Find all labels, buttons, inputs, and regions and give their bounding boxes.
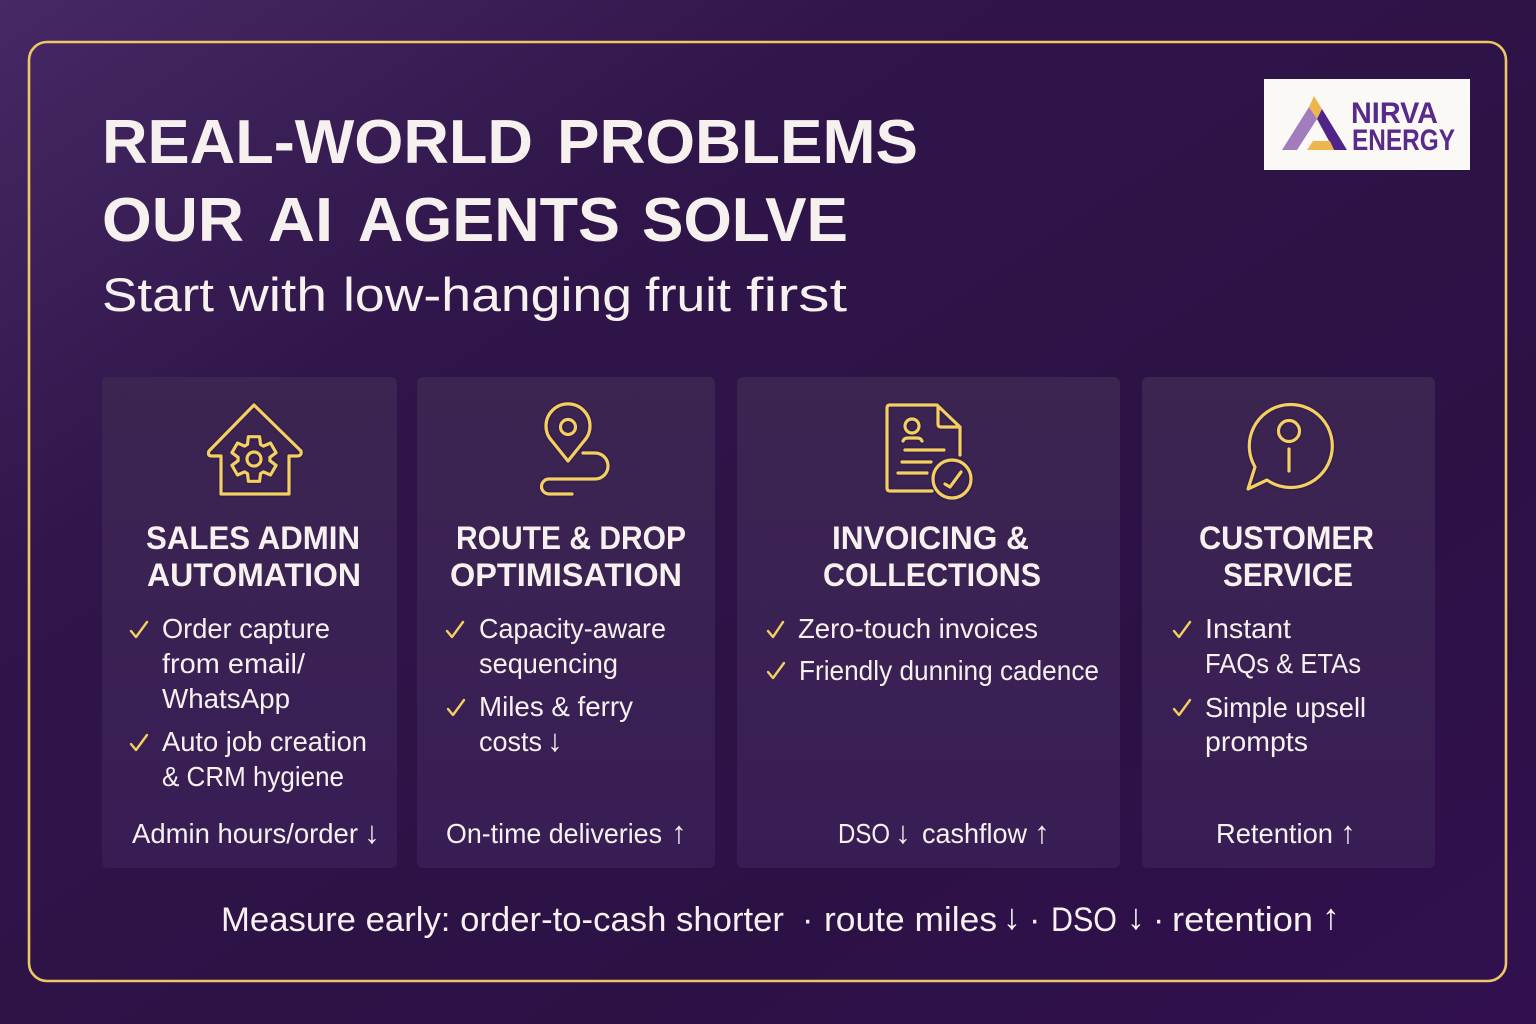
checklist: sales admin: & CRM hygiene bbox=[162, 761, 344, 792]
subtitle: first bbox=[746, 268, 847, 321]
checklist: route: Miles & ferry bbox=[479, 691, 633, 722]
metric: DSO and cashflow bbox=[838, 815, 1050, 850]
footer measures line: ↑ bbox=[1322, 896, 1340, 937]
heading: customer service bbox=[1199, 520, 1374, 593]
metric: retention: ↑ bbox=[1340, 815, 1356, 850]
footer measures line: retention bbox=[1172, 901, 1313, 939]
checklist: invoicing: Friendly dunning cadence bbox=[799, 655, 1099, 686]
icon: info speech bubble bbox=[1248, 404, 1332, 489]
metric: on-time deliveries: On-time deliveries bbox=[446, 818, 662, 849]
footer measures line: · bbox=[1153, 901, 1164, 939]
footer measures line: · bbox=[1029, 901, 1040, 939]
panel: route and drop optimisation bbox=[417, 377, 715, 868]
panel: invoicing and collections bbox=[737, 377, 1120, 868]
heading: invoicing and collections: COLLECTIONS bbox=[823, 557, 1041, 593]
subtitle: low-hanging bbox=[343, 268, 632, 321]
heading: invoicing and collections: INVOICING & bbox=[832, 520, 1029, 556]
heading: route and drop optimisation: OPTIMISATION bbox=[450, 557, 682, 593]
subtitle bbox=[102, 268, 847, 321]
panel: customer service bbox=[1142, 377, 1435, 868]
heading: route and drop optimisation: ROUTE & DROP bbox=[456, 520, 686, 556]
title: AGENTS bbox=[358, 186, 620, 255]
metric: DSO and cashflow: ↑ bbox=[1034, 815, 1050, 850]
checklist: customer service bbox=[1174, 613, 1366, 757]
checklist: invoicing bbox=[768, 613, 1099, 686]
footer measures line: DSO bbox=[1051, 901, 1117, 939]
checklist: customer service: prompts bbox=[1205, 726, 1308, 757]
heading: sales admin automation: SALES ADMIN bbox=[146, 520, 360, 556]
checklist: sales admin: Order capture bbox=[162, 613, 330, 644]
heading: sales admin automation: AUTOMATION bbox=[147, 557, 361, 593]
metric: admin hours: ↓ bbox=[364, 815, 380, 850]
subtitle: fruit bbox=[645, 268, 731, 321]
icon: document with check bbox=[887, 405, 971, 498]
checklist: sales admin: Auto job creation bbox=[162, 726, 367, 757]
icon: house with gear bbox=[208, 405, 301, 494]
checklist: route: ↓ bbox=[547, 723, 563, 758]
checklist: sales admin: from email/ bbox=[162, 648, 305, 679]
logo: Nirva Energy: NIRVA bbox=[1351, 97, 1438, 130]
logo: Nirva Energy: ENERGY bbox=[1352, 124, 1455, 157]
footer measures line: ↓ bbox=[1127, 896, 1145, 937]
checklist: route: sequencing bbox=[479, 648, 618, 679]
panel: sales admin automation bbox=[102, 377, 397, 868]
checklist: route bbox=[447, 613, 666, 758]
title: AI bbox=[268, 186, 333, 255]
checklist: route: costs bbox=[479, 726, 542, 757]
metric: DSO and cashflow: DSO bbox=[838, 818, 890, 849]
heading: invoicing and collections bbox=[823, 520, 1041, 593]
checklist: invoicing: Zero-touch invoices bbox=[798, 613, 1038, 644]
heading: route and drop optimisation bbox=[450, 520, 686, 593]
checklist: customer service: FAQs & ETAs bbox=[1205, 648, 1361, 679]
metric: on-time deliveries: ↑ bbox=[671, 815, 687, 850]
title: SOLVE bbox=[642, 186, 848, 255]
footer measures line bbox=[221, 896, 1340, 939]
footer measures line: route miles bbox=[824, 901, 997, 939]
checklist: sales admin bbox=[131, 613, 367, 792]
heading: customer service: CUSTOMER bbox=[1199, 520, 1374, 556]
title bbox=[102, 108, 918, 255]
title: REAL-WORLD bbox=[102, 108, 533, 177]
footer measures line: Measure early: order-to-cash shorter bbox=[221, 901, 784, 939]
metric: DSO and cashflow: cashflow bbox=[922, 818, 1028, 849]
heading: sales admin automation bbox=[146, 520, 361, 593]
subtitle: with bbox=[228, 268, 327, 321]
metric: DSO and cashflow: ↓ bbox=[895, 815, 911, 850]
subtitle: Start bbox=[102, 268, 214, 321]
footer measures line: · bbox=[802, 901, 813, 939]
title: OUR bbox=[102, 186, 244, 255]
heading: customer service: SERVICE bbox=[1223, 557, 1353, 593]
footer measures line: ↓ bbox=[1003, 896, 1021, 937]
checklist: customer service: Simple upsell bbox=[1205, 692, 1366, 723]
checklist: customer service: Instant bbox=[1205, 613, 1291, 644]
metric: admin hours: Admin hours/order bbox=[132, 818, 358, 849]
checklist: sales admin: WhatsApp bbox=[162, 683, 290, 714]
icon: map pin with route bbox=[542, 404, 608, 494]
logo: Nirva Energy bbox=[1264, 79, 1470, 170]
title: PROBLEMS bbox=[557, 108, 918, 177]
metric: retention: Retention bbox=[1216, 818, 1333, 849]
checklist: route: Capacity-aware bbox=[479, 613, 666, 644]
